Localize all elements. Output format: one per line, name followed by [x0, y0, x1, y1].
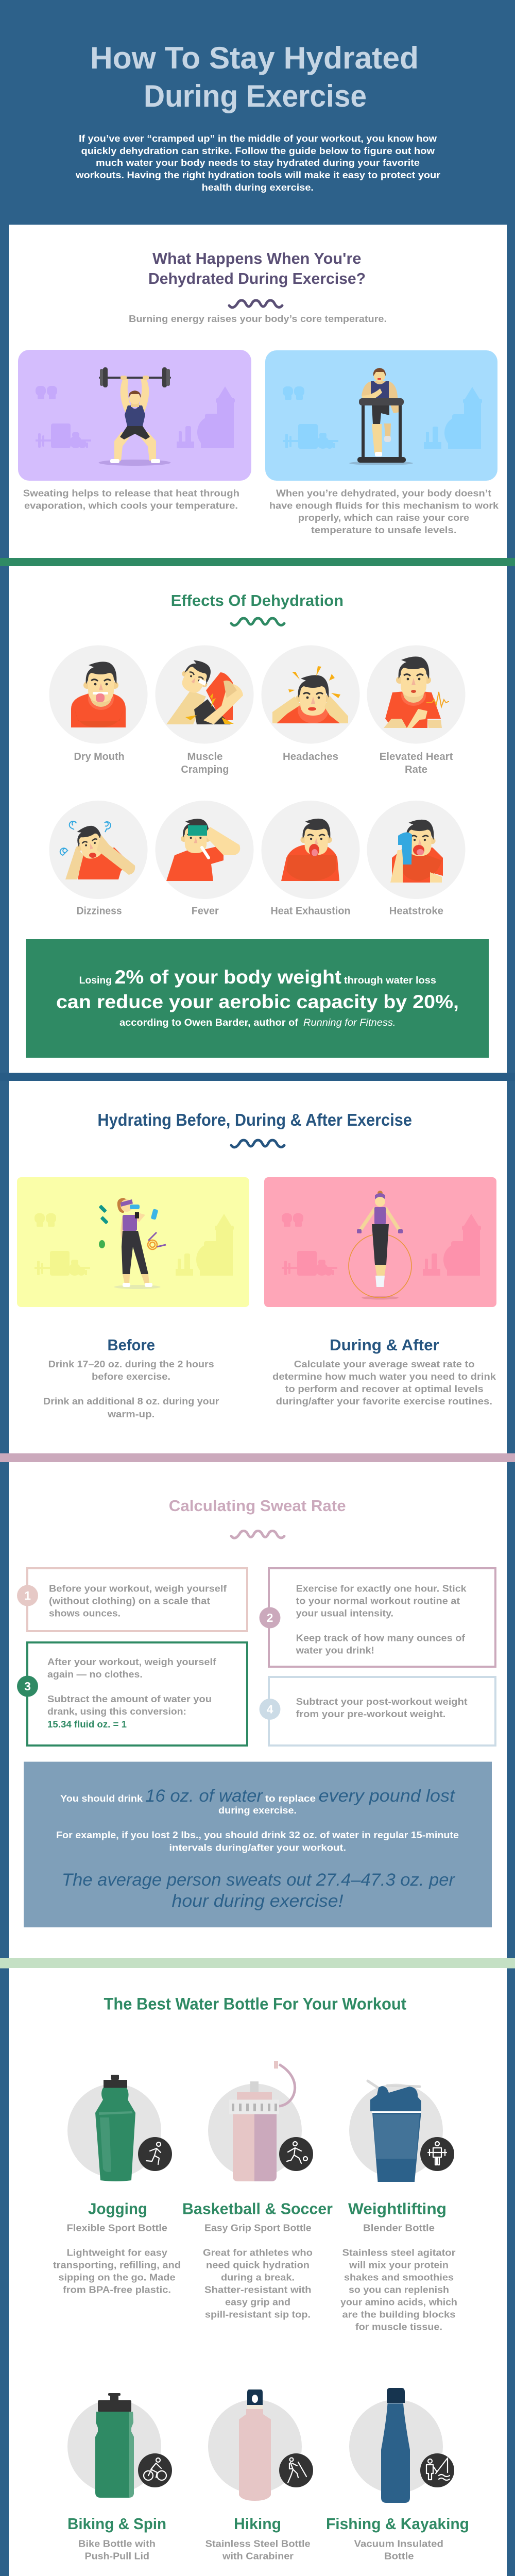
- step 4: Subtract your post-workout weight: [296, 1697, 468, 1707]
- column: before: Before: [107, 1336, 155, 1354]
- caption: dehydrated: [269, 488, 499, 535]
- label: weightlifting: Blender Bottle: [363, 2223, 435, 2233]
- label: jogging: transporting, refilling, and: [53, 2260, 181, 2270]
- column: during and after: During & After: [330, 1336, 439, 1354]
- label: biking and spin: Bike Bottle with: [78, 2539, 156, 2549]
- label: biking and spin: Biking & Spin: [67, 2515, 166, 2533]
- caption: sweating: [23, 488, 239, 511]
- panel: calculating sweat rate: [9, 1462, 507, 1958]
- panel: effects of dehydration: [9, 566, 507, 1073]
- effect: headaches: Headaches: [283, 751, 338, 762]
- icon: water bottle: [151, 1209, 158, 1220]
- caption: dehydrated: temperature to unsafe levels.: [311, 525, 456, 535]
- intro text: If you’ve ever “cramped up” in the middle of your workout, you know how: [79, 133, 437, 144]
- step 2: 2: [267, 1611, 273, 1624]
- label: weightlifting: [340, 2200, 457, 2332]
- card: during and after illustration: [264, 1177, 496, 1307]
- step 4: [260, 1677, 495, 1745]
- label: basketball and soccer: easy grip and: [225, 2297, 290, 2307]
- callout: aerobic capacity: through water loss: [344, 975, 436, 986]
- effect: dry mouth: [49, 645, 147, 762]
- figure: woman drinking: [114, 1198, 161, 1289]
- title: [90, 41, 419, 113]
- bottle: fishing and kayaking: [349, 2388, 454, 2503]
- squiggle divider: [229, 300, 282, 308]
- icon: weightlifter: [420, 2137, 454, 2171]
- step 2: water you drink!: [296, 1646, 374, 1656]
- callout: aerobic capacity: can reduce your aerobic capacity by 20%,: [56, 991, 459, 1012]
- heading: What Happens When You're: [152, 249, 362, 267]
- label: jogging: Flexible Sport Bottle: [67, 2223, 167, 2233]
- gym silhouettes: [283, 386, 482, 449]
- caption: sweating: evaporation, which cools your temperature.: [24, 501, 238, 511]
- effect: heat exhaustion: Heat Exhaustion: [271, 906, 350, 917]
- label: jogging: sipping on the go. Made: [59, 2272, 175, 2282]
- label: jogging: Lightweight for easy: [67, 2247, 167, 2258]
- callout: aerobic capacity: according to Owen Barder, author of: [119, 1018, 299, 1028]
- column: during and after: to perform and recover at optimal levels: [285, 1384, 484, 1394]
- title: How To Stay Hydrated: [90, 41, 419, 75]
- step 4: from your pre-workout weight.: [296, 1709, 445, 1719]
- label: weightlifting: will mix your protein: [349, 2260, 449, 2270]
- label: jogging: Jogging: [88, 2200, 147, 2217]
- caption: dehydrated: When you’re dehydrated, your body doesn’t: [276, 488, 491, 499]
- label: basketball and soccer: Great for athletes who: [203, 2247, 313, 2258]
- card: before illustration: [17, 1177, 249, 1307]
- label: weightlifting: shakes and smoothies: [344, 2272, 454, 2282]
- section divider: green band: [0, 558, 515, 566]
- step 2: your usual intensity.: [296, 1608, 393, 1619]
- label: biking and spin: [63, 2515, 170, 2576]
- heading: Effects Of Dehydration: [171, 591, 344, 609]
- effect: dry mouth: Dry Mouth: [74, 751, 125, 762]
- step 3: 15.34 fluid oz. = 1: [47, 1719, 127, 1730]
- label: basketball and soccer: need quick hydration: [206, 2260, 310, 2270]
- callout: aerobic capacity: Losing: [79, 975, 112, 986]
- label: hiking: Hiking: [234, 2515, 281, 2533]
- figure: woman jumping rope: [349, 1191, 411, 1299]
- figure: weightlifter: [99, 367, 171, 466]
- effect: muscle cramping: Muscle: [187, 751, 222, 762]
- bottle: hiking: [208, 2389, 313, 2501]
- icon: dumbbells: [99, 1205, 109, 1224]
- callout: how much to drink: 16 oz. of water: [145, 1786, 264, 1806]
- intro text: quickly dehydration can strike. Follow the guide below to figure out how: [81, 146, 435, 156]
- callout: aerobic capacity: Running for Fitness.: [303, 1018, 396, 1028]
- step 1: shows ounces.: [49, 1608, 121, 1619]
- intro text: health during exercise.: [202, 182, 314, 193]
- column: during and after: determine how much water you need to drink: [272, 1371, 496, 1382]
- effect: dizziness: Dizziness: [77, 906, 122, 917]
- callout: how much to drink: during exercise.: [218, 1805, 297, 1816]
- figure: treadmill runner: [349, 368, 413, 465]
- gym silhouettes: [282, 1213, 481, 1276]
- effect: fever: [156, 801, 253, 917]
- effect: heatstroke: [367, 801, 466, 917]
- label: weightlifting: Weightlifting: [348, 2200, 447, 2217]
- step 2: to your normal workout routine at: [296, 1596, 460, 1606]
- panel: hydrating before during after: [9, 1081, 507, 1453]
- step 2: [260, 1568, 495, 1667]
- label: basketball and soccer: spill-resistant sip top.: [205, 2309, 311, 2319]
- step 1: [17, 1568, 247, 1631]
- effect: elevated heart rate: [367, 645, 466, 775]
- callout: how much to drink: You should drink: [60, 1793, 143, 1804]
- column: during and after: Calculate your average sweat rate to: [294, 1359, 475, 1369]
- bottle: biking and spin: [67, 2393, 172, 2498]
- heading: Calculating Sweat Rate: [169, 1497, 346, 1515]
- step 3: 3: [24, 1680, 31, 1693]
- effect: fever: Fever: [192, 906, 219, 917]
- label: basketball and soccer: [182, 2200, 333, 2319]
- label: jogging: from BPA-free plastic.: [63, 2284, 171, 2295]
- caption: dehydrated: properly, which can raise your core: [298, 513, 469, 523]
- label: weightlifting: are the building blocks: [342, 2309, 455, 2319]
- step 3: drank, using this conversion:: [47, 1706, 186, 1717]
- bottle: weightlifting: [349, 2081, 454, 2182]
- callout: how much to drink: The average person sweats out 27.4–47.3 oz. per: [62, 1870, 456, 1890]
- caption: dehydrated: have enough fluids for this mechanism to work: [269, 501, 499, 511]
- column: before: Drink an additional 8 oz. during your: [43, 1396, 219, 1406]
- step 3: Subtract the amount of water you: [47, 1694, 212, 1704]
- callout: how much to drink: hour during exercise!: [172, 1891, 344, 1911]
- step 2: Exercise for exactly one hour. Stick: [296, 1584, 467, 1594]
- callout: aerobic capacity: 2% of your body weight: [115, 967, 341, 988]
- label: hiking: [204, 2515, 312, 2576]
- label: weightlifting: your amino acids, which: [340, 2297, 457, 2307]
- callout: how much to drink: intervals during/after your workout.: [169, 1842, 346, 1853]
- card: sweating illustration: [18, 350, 251, 481]
- step 3: After your workout, weigh yourself: [47, 1657, 217, 1667]
- effect: headaches: [262, 645, 359, 762]
- label: basketball and soccer: Easy Grip Sport Bottle: [204, 2223, 312, 2233]
- squiggle divider: [231, 618, 284, 625]
- heading: Hydrating Before, During & After Exercise: [97, 1110, 412, 1129]
- effect: heat exhaustion: [262, 801, 359, 917]
- icon: cyclist: [138, 2453, 172, 2487]
- icon: runner: [138, 2137, 172, 2171]
- step 2: Keep track of how many ounces of: [296, 1633, 466, 1643]
- label: weightlifting: so you can replenish: [349, 2284, 449, 2295]
- label: basketball and soccer: during a break.: [221, 2272, 295, 2282]
- panel: what happens when dehydrated: [9, 225, 507, 558]
- section divider: mauve band: [0, 1453, 515, 1462]
- panel: header: [75, 41, 440, 193]
- step 3: again — no clothes.: [47, 1669, 143, 1680]
- icon: hiker: [279, 2453, 313, 2487]
- icon: jump rope: [148, 1232, 166, 1249]
- label: fishing and kayaking: Bottle: [384, 2551, 414, 2562]
- bottle: basketball and soccer: [208, 2061, 313, 2181]
- icon: apple: [99, 1240, 105, 1248]
- label: weightlifting: Stainless steel agitator: [342, 2247, 455, 2258]
- effect: dizziness: [49, 801, 147, 917]
- label: fishing and kayaking: Vacuum Insulated: [354, 2539, 443, 2549]
- column: during and after: during/after your favorite exercise routines.: [276, 1396, 492, 1406]
- squiggle divider: [231, 1531, 284, 1538]
- icon: angler: [420, 2453, 454, 2487]
- step 3: [17, 1642, 247, 1745]
- column: before: warm-up.: [107, 1409, 154, 1419]
- column: before: before exercise.: [92, 1371, 170, 1382]
- section divider: blue band: [0, 1073, 515, 1081]
- bottle: jogging: [67, 2075, 172, 2181]
- gym silhouettes: [36, 386, 235, 448]
- effect: muscle cramping: [156, 645, 253, 775]
- column: during and after: [272, 1336, 496, 1406]
- card: dehydrated illustration: [265, 350, 497, 481]
- label: fishing and kayaking: [326, 2515, 469, 2576]
- label: basketball and soccer: Shatter-resistant with: [204, 2284, 312, 2295]
- intro text: [75, 133, 440, 193]
- callout: how much to drink: to replace: [265, 1793, 316, 1804]
- callout: aerobic capacity: [26, 939, 489, 1058]
- subheading: Burning energy raises your body’s core temperature.: [129, 314, 387, 324]
- title: During Exercise: [144, 79, 367, 113]
- callout: how much to drink: [24, 1762, 492, 1927]
- column: before: [43, 1336, 219, 1419]
- label: fishing and kayaking: Fishing & Kayaking: [326, 2515, 469, 2533]
- label: biking and spin: Push-Pull Lid: [84, 2551, 149, 2562]
- panel: best water bottles: [9, 1968, 507, 2576]
- step 4: 4: [267, 1702, 273, 1716]
- label: hiking: Stainless Steel Bottle: [205, 2539, 311, 2549]
- column: before: Drink 17–20 oz. during the 2 hours: [48, 1359, 214, 1369]
- effect: elevated heart rate: Rate: [405, 764, 427, 775]
- squiggle divider: [231, 1140, 284, 1147]
- step 1: Before your workout, weigh yourself: [49, 1584, 227, 1594]
- label: basketball and soccer: Basketball & Soccer: [182, 2200, 333, 2217]
- caption: sweating: Sweating helps to release that heat through: [23, 488, 239, 499]
- effect: muscle cramping: Cramping: [181, 764, 229, 775]
- heading: Dehydrated During Exercise?: [148, 269, 366, 287]
- heading: The Best Water Bottle For Your Workout: [104, 1995, 406, 2013]
- label: hiking: with Carabiner: [222, 2551, 294, 2562]
- section divider: light green band: [0, 1958, 515, 1968]
- heading: [148, 249, 366, 287]
- effect: elevated heart rate: Elevated Heart: [380, 751, 453, 762]
- intro text: much water your body needs to stay hydrated during your favorite: [96, 158, 420, 168]
- effect: heatstroke: Heatstroke: [389, 906, 443, 917]
- label: jogging: [53, 2200, 181, 2295]
- gym silhouettes: [35, 1213, 234, 1276]
- icon: soccer: [279, 2137, 313, 2171]
- label: weightlifting: for muscle tissue.: [355, 2321, 442, 2332]
- step 1: (without clothing) on a scale that: [49, 1596, 210, 1606]
- callout: how much to drink: For example, if you lost 2 lbs., you should drink 32 oz. of water in regular 15-minute: [56, 1830, 459, 1840]
- callout: how much to drink: every pound lost: [319, 1786, 456, 1806]
- intro text: workouts. Having the right hydration tools will make it easy to protect your: [75, 170, 440, 180]
- step 1: 1: [24, 1589, 31, 1602]
